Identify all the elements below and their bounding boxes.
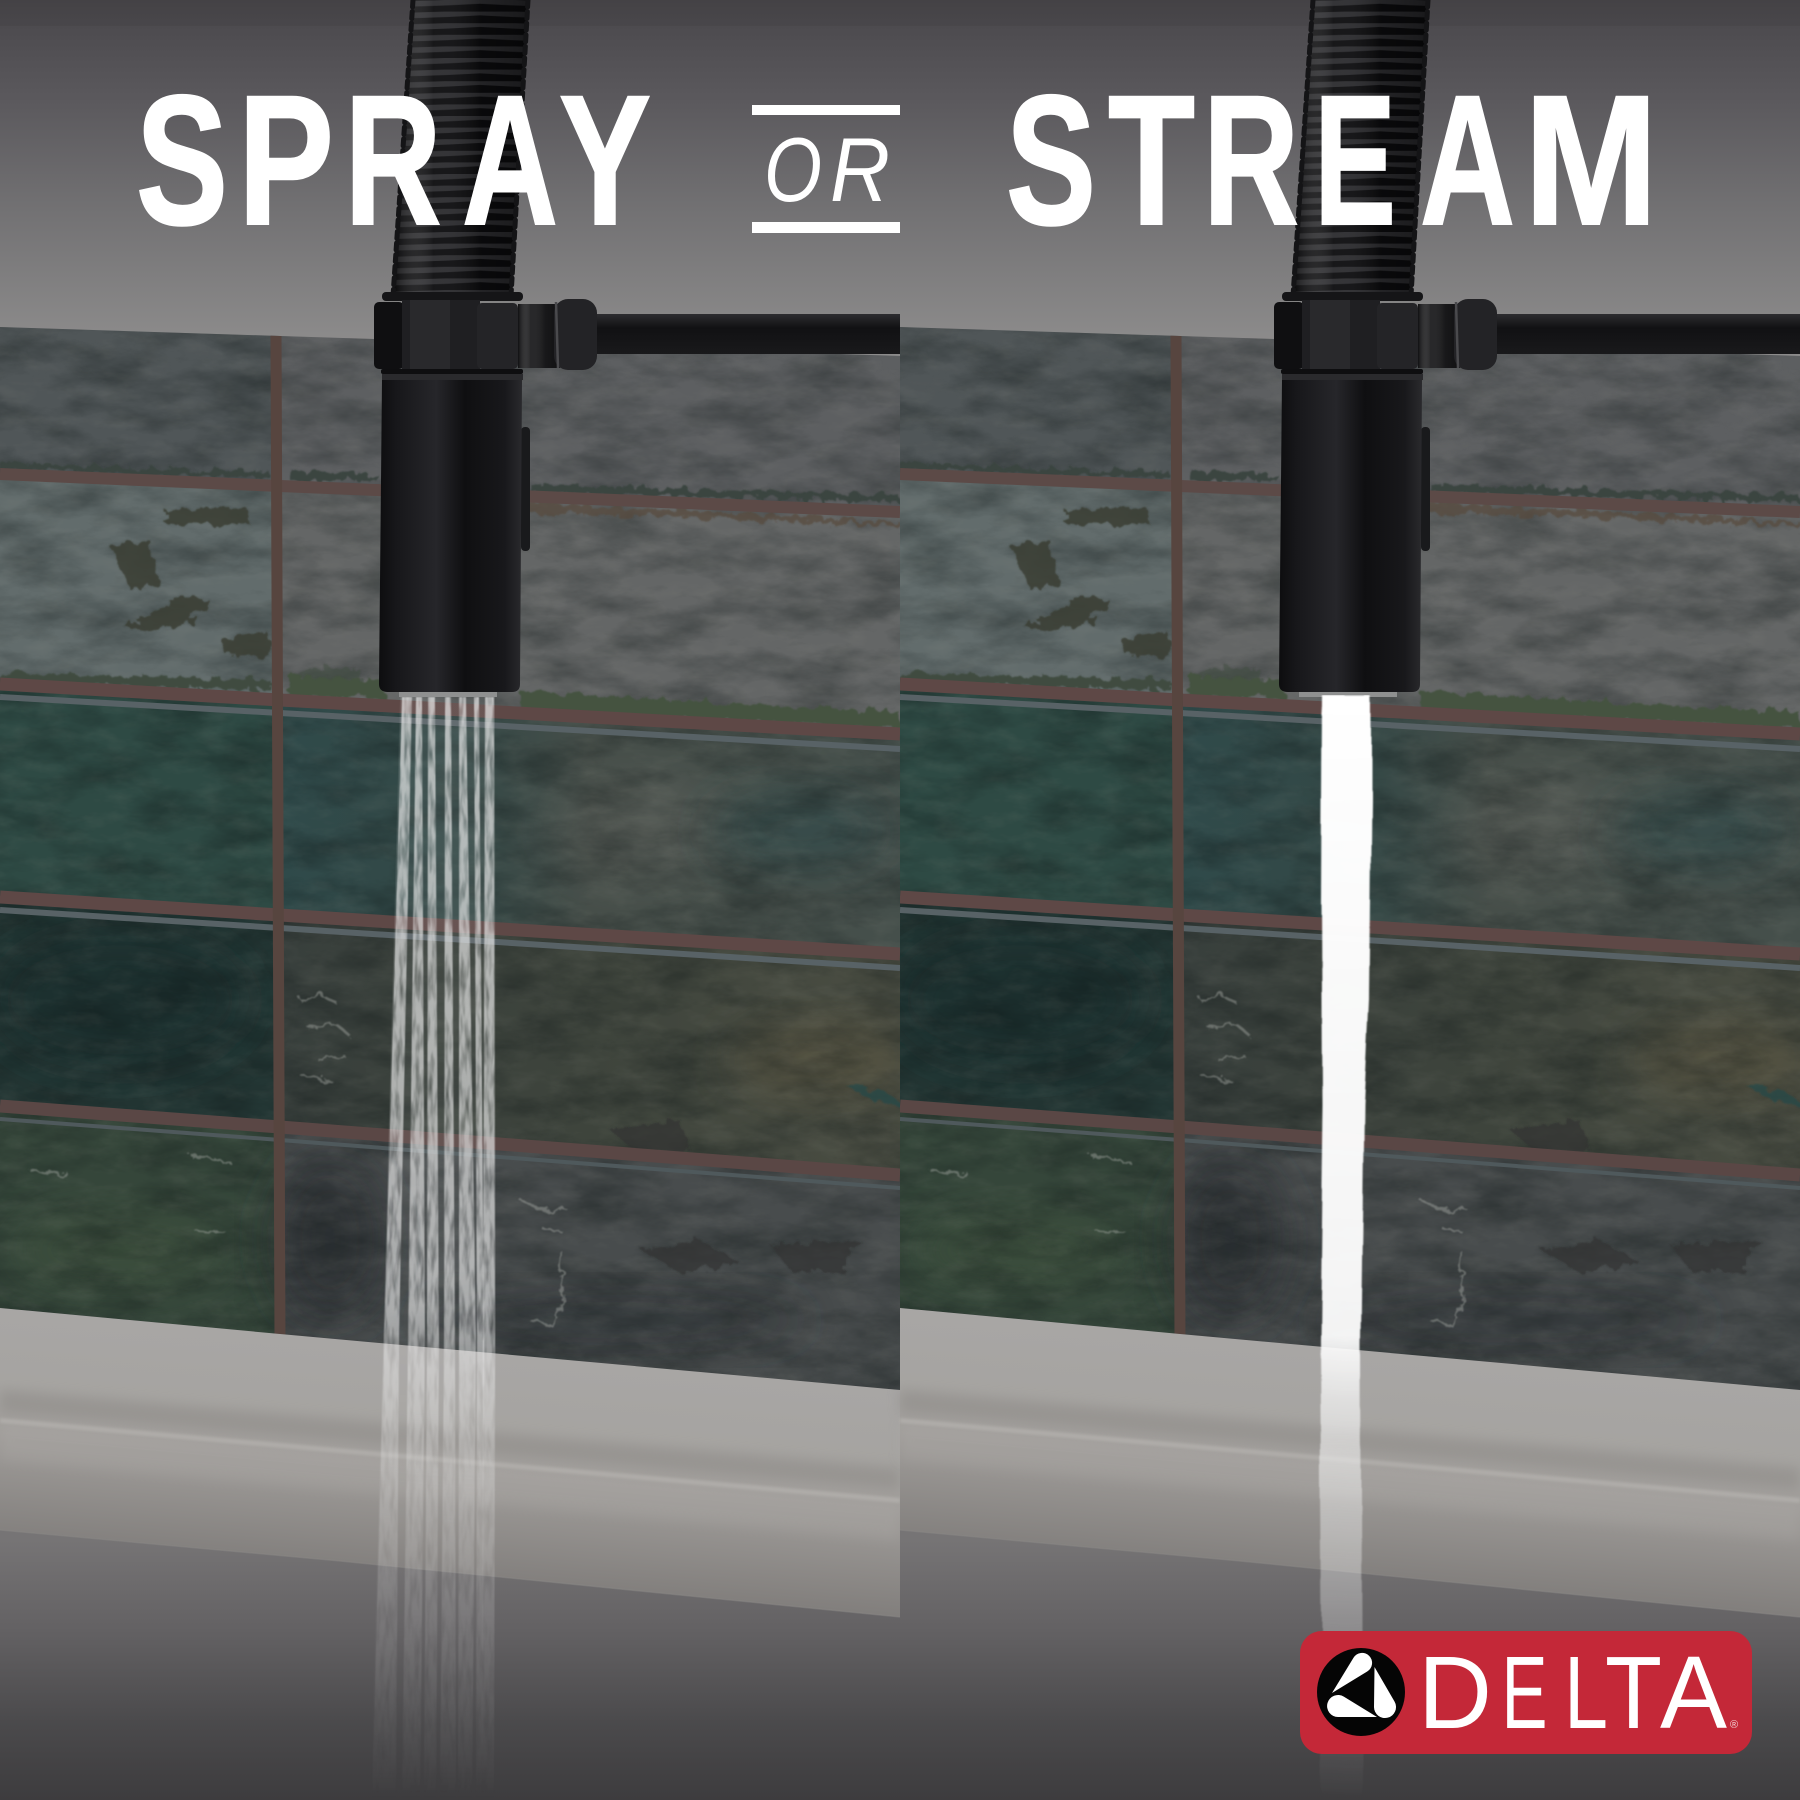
logo: Delta badge	[1300, 1631, 1752, 1754]
wordmark: L	[1564, 1635, 1608, 1750]
icon: Delta triangle mark	[1317, 1648, 1405, 1736]
wordmark: D	[1418, 1635, 1492, 1750]
registered mark: ®	[1730, 1719, 1738, 1731]
wordmark: E	[1502, 1635, 1548, 1750]
faucet head, hose and arm	[374, 0, 900, 697]
title: SPRAY: A	[462, 58, 558, 264]
wordmark: T	[1605, 1635, 1662, 1750]
title: STREAM: S	[1006, 58, 1096, 264]
title: SPRAY: P	[238, 58, 334, 264]
title: STREAM: M	[1524, 58, 1658, 264]
tile wall and counter background	[0, 0, 912, 1800]
tile wall and counter background	[890, 0, 1800, 1800]
panel: spray (left)	[0, 0, 912, 1800]
label: OR with rules: R	[830, 120, 890, 221]
title: SPRAY: S	[136, 58, 228, 264]
faucet head, hose and arm	[1274, 0, 1800, 697]
spray water streams	[370, 697, 496, 1800]
title: STREAM: T	[1108, 58, 1195, 264]
label: OR with rules: O	[764, 120, 822, 221]
title: SPRAY: Y	[559, 58, 651, 264]
panel: stream (right)	[890, 0, 1800, 1800]
title: SPRAY: R	[344, 58, 442, 264]
wordmark: A	[1660, 1635, 1727, 1750]
label: OR with rules	[752, 105, 900, 233]
solid stream of water	[1320, 695, 1371, 1800]
title: STREAM: A	[1420, 58, 1515, 264]
title: STREAM: R	[1203, 58, 1299, 264]
title: STREAM: E	[1314, 58, 1396, 264]
